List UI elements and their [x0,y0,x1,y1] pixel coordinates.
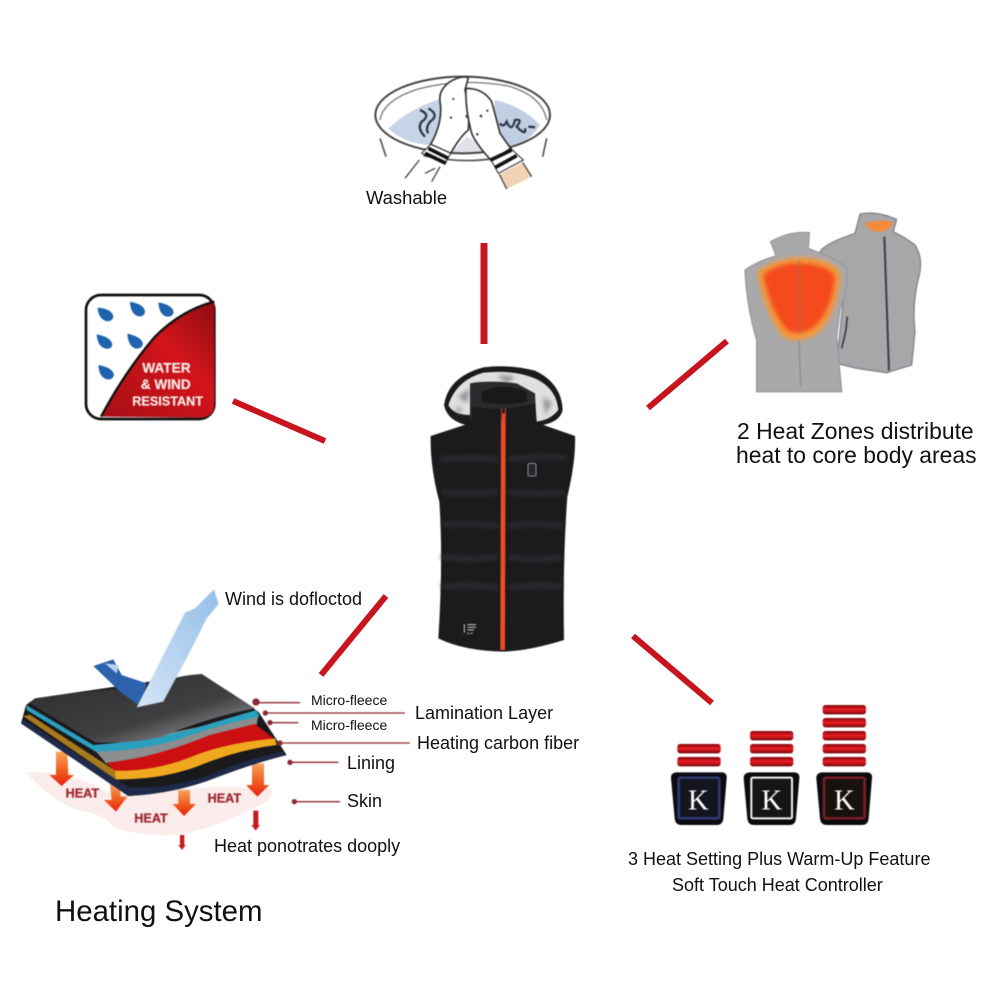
connector: heat zones [648,341,727,408]
label: washable: Washable [366,187,447,208]
label: heat zones: 2 Heat Zones distribute [737,418,974,444]
connector: water resistant [233,401,325,441]
hood silver lining [448,372,558,422]
label: lamination layer: Lamination Layer [415,703,553,723]
sock left [431,77,469,153]
label: micro-fleece lower: Micro-fleece [311,717,387,733]
blue arrow incoming [93,659,147,706]
hood [444,366,563,426]
water drops [97,302,174,379]
connector: heat controller [633,636,712,703]
bottom navy edge [21,719,287,796]
label: lining: Lining [347,753,395,773]
heat controller button [528,463,536,476]
icon: fabric layers diagram [21,589,410,850]
sock right [466,88,511,161]
orange zipper [496,413,510,650]
back vest [745,232,847,392]
high setting: K [834,785,855,817]
layer stack base [21,674,287,796]
main product: black hooded heated vest [431,366,575,652]
low setting [671,744,727,825]
red layer [107,724,275,772]
icon: water and wind resistant badge: & WIND [141,377,191,392]
heat zone glow [757,257,841,340]
icon: fabric layers diagram: HEAT [208,792,241,806]
medium setting: K [761,785,782,817]
icon: fabric layers diagram: HEAT [66,786,99,800]
label: heat settings: 3 Heat Setting Plus Warm-Up Feature [628,849,930,869]
skin layer [27,772,272,835]
label: heat settings: Soft Touch Heat Controller [672,875,883,895]
connector: heating system [321,596,386,675]
body [431,403,575,652]
blue edge [26,705,259,751]
top black layer [30,674,255,743]
icon: three heat setting controllers [671,705,872,825]
label: heating carbon fiber: Heating carbon fiber [417,733,579,753]
label dots and leaders [253,699,410,804]
deflected wind arrow [137,589,219,707]
front vest [820,213,921,373]
label: heat zones: heat to core body areas [736,442,977,468]
grey fleece [93,715,258,764]
heat zone core [763,263,835,333]
icon: two grey vests with heat zones [745,213,921,392]
low setting: K [688,785,709,817]
icon: water and wind resistant badge [86,295,214,419]
medium setting [744,731,799,825]
icon: water and wind resistant badge: WATER [142,360,191,375]
high setting [816,705,872,825]
quilting highlights [440,457,567,588]
label: skin: Skin [347,791,382,811]
icon: fabric layers diagram: HEAT [134,812,168,826]
icon: water and wind resistant badge: RESISTANT [132,395,203,409]
icon: washing bowl with socks [375,77,550,189]
heat arrows [49,752,269,816]
label: wind deflected: Wind is dofloctod [225,589,362,609]
label: heat penetrates: Heat ponotrates dooply [214,836,400,856]
label: micro-fleece upper: Micro-fleece [311,692,387,708]
heading: heating system: Heating System [55,895,262,928]
connector: washable [480,243,488,344]
hem label [464,624,476,633]
yellow layer [23,715,277,779]
